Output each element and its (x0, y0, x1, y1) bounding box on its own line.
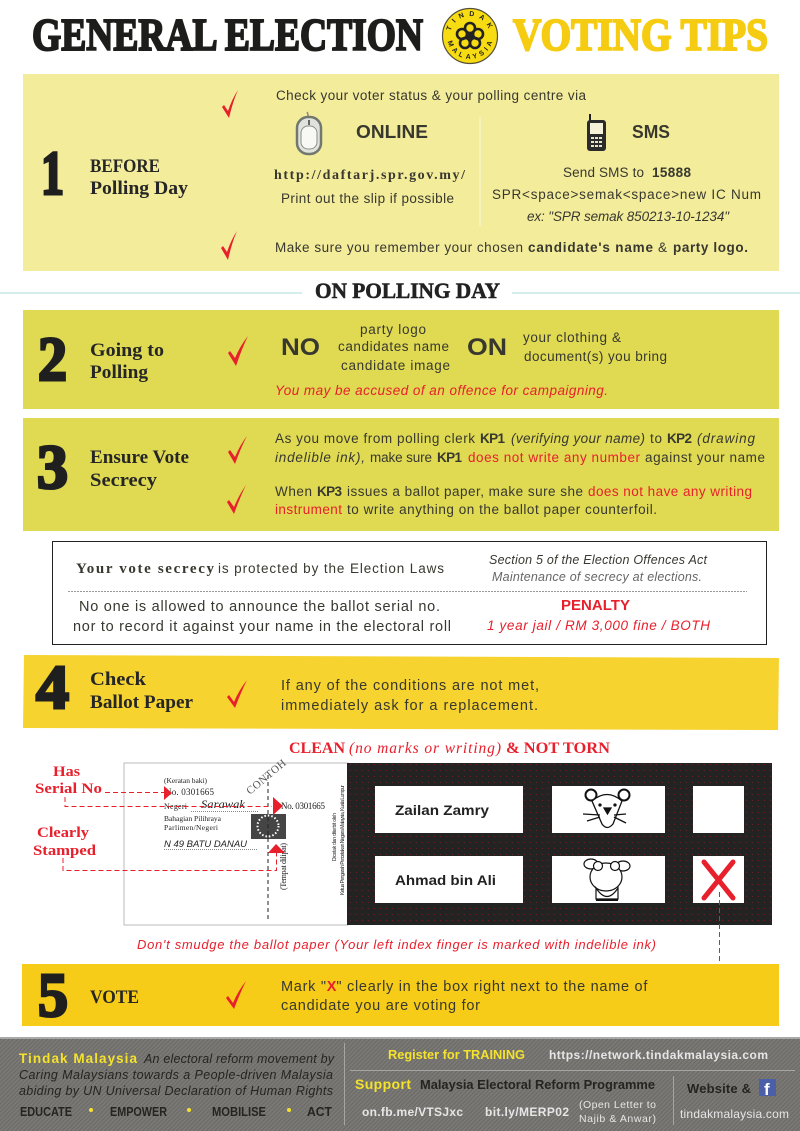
candidate reminder: Make sure you remember your chosen (275, 240, 523, 255)
clerk instructions: (verifying your name) (511, 431, 645, 446)
label: online: ONLINE (356, 122, 428, 142)
vote secrecy statement: is protected by the Election Laws (218, 561, 444, 576)
ballot counterfoil text: Parlimen/Negeri (164, 823, 218, 832)
stamp (251, 814, 286, 839)
clerk instructions: to (650, 431, 662, 446)
divider: on polling day (0, 278, 800, 304)
ballot counterfoil text: N 49 BATU DANAU (164, 839, 247, 850)
clothing and documents: document(s) you bring (524, 349, 667, 364)
ballot paper instructions: does not have any writing (588, 484, 752, 499)
ballot paper sample (124, 757, 772, 925)
about Tindak Malaysia: Caring Malaysians towards a People-driven Malaysia (19, 1068, 333, 1082)
support: Malaysia Electoral Reform Programme (420, 1077, 655, 1092)
printer note (332, 785, 346, 895)
clerk instructions: (drawing (697, 431, 755, 446)
clerk instructions: KP1 (480, 431, 505, 446)
ballot paper instructions: to write anything on the ballot paper counterfoil. (347, 502, 657, 517)
candidate row 1 (375, 786, 744, 833)
icon: mouse (297, 112, 321, 154)
pointer lines and arrows (63, 786, 720, 962)
panel 3: ensure vote secrecy (23, 418, 779, 531)
election offences act reference: Maintenance of secrecy at elections. (492, 570, 702, 584)
icon: check mark (228, 336, 248, 366)
list of prohibited items: party logo (360, 322, 426, 337)
sms instructions: Send SMS to (563, 165, 644, 180)
heading: clean and not torn: (no marks or writing) (349, 740, 501, 757)
sms instructions: SPR<space>semak<space>new IC Num (492, 187, 761, 202)
replacement instruction: If any of the conditions are not met, (281, 678, 539, 694)
clerk instructions: KP2 (667, 431, 692, 446)
motto: MOBILISE (212, 1105, 266, 1119)
support: Najib & Anwar) (579, 1113, 656, 1125)
motto: EMPOWER (110, 1105, 167, 1119)
candidate reminder: & (658, 240, 667, 255)
clothing and documents: your clothing & (523, 330, 621, 345)
step number 2: 2 (38, 326, 67, 394)
ballot paper instructions: When (275, 484, 312, 499)
list of prohibited items: candidates name (338, 339, 449, 354)
ballot paper instructions: KP3 (317, 484, 342, 499)
vote secrecy statement: Your vote secrecy (76, 561, 214, 577)
training registration: https://network.tindakmalaysia.com (549, 1048, 768, 1062)
support: Support (355, 1076, 411, 1092)
heading: going to polling: Going to (90, 341, 164, 361)
sms instructions: 15888 (652, 165, 691, 180)
heading: ensure vote secrecy: Ensure Vote (90, 448, 189, 468)
fold label: (Tempat dilipat) (279, 843, 288, 890)
website address: tindakmalaysia.com (680, 1107, 789, 1121)
voter status intro: Check your voter status & your polling centre via (276, 88, 586, 103)
title: general election: GENERAL ELECTION (32, 10, 423, 60)
step number 3: 3 (37, 434, 68, 502)
icon: mobile phone (587, 114, 606, 151)
penalty details: 1 year jail / RM 3,000 fine / BOTH (487, 618, 710, 633)
list of prohibited items: candidate image (341, 358, 450, 373)
panel: vote secrecy law box (52, 542, 766, 644)
clerk instructions: KP1 (437, 450, 462, 465)
label: has serial no: Has (53, 764, 80, 780)
heading: clean and not torn: & NOT TORN (506, 740, 610, 757)
about Tindak Malaysia: Tindak Malaysia (19, 1051, 137, 1066)
sms instructions (492, 165, 761, 224)
election offences act reference (489, 553, 708, 584)
penalty heading: PENALTY (561, 597, 630, 614)
icon: hamster logo (584, 859, 630, 900)
icon: mouse logo (583, 790, 630, 828)
ballot counterfoil text (164, 776, 326, 850)
icon: facebook: f (764, 1080, 770, 1099)
support: on.fb.me/VTSJxc (362, 1105, 463, 1119)
icon: check mark (222, 90, 238, 118)
icon: check mark (227, 485, 246, 514)
clerk instructions: indelible ink), (275, 450, 365, 465)
replacement instruction: immediately ask for a replacement. (281, 698, 538, 714)
icon: check mark (221, 231, 237, 260)
step number 5: 5 (38, 962, 68, 1030)
panel 1: before polling day (23, 74, 779, 271)
ballot counterfoil text: (Keratan baki) (164, 776, 208, 785)
ballot counterfoil text: Sarawak (201, 797, 246, 811)
sms instructions: ex: "SPR semak 850213-10-1234" (527, 209, 730, 224)
heading: before polling day: Polling Day (90, 179, 189, 199)
candidate row 1: Zailan Zamry (395, 803, 490, 818)
printer note: Dicetak dan diterbit oleh (332, 813, 338, 861)
marked X (704, 862, 733, 898)
ballot paper instructions: issues a ballot paper, make sure she (347, 484, 583, 499)
clerk instructions: against your name (645, 450, 765, 465)
label: sms: SMS (632, 122, 670, 142)
support: bit.ly/MERP02 (485, 1105, 569, 1119)
panel 5: vote (22, 962, 779, 1030)
candidate reminder: candidate's name (528, 240, 653, 255)
heading: clean and not torn: CLEAN (289, 740, 345, 757)
divider: on polling day: ON POLLING DAY (315, 278, 500, 303)
icon: check mark (226, 981, 246, 1009)
heading: check ballot paper: Ballot Paper (90, 693, 193, 713)
candidate row 2: Ahmad bin Ali (395, 873, 496, 888)
label: on: ON (467, 334, 507, 361)
label: no: NO (281, 334, 320, 361)
election offences act reference: Section 5 of the Election Offences Act (489, 553, 708, 567)
ballot counterfoil text: No. 0301665 (281, 801, 326, 811)
vote instruction: Mark " (281, 979, 326, 995)
ballot counterfoil text: No. 0301665 (165, 787, 214, 797)
online address and note (274, 168, 466, 206)
icon: Tindak Malaysia logo: TINDAK (446, 11, 493, 30)
label: clearly stamped: Stamped (33, 843, 97, 859)
clerk instructions: make sure (370, 450, 432, 465)
online address and note: Print out the slip if possible (281, 191, 454, 206)
candidate row 2 (375, 856, 744, 903)
panel 4: check ballot paper (23, 654, 779, 730)
clerk instructions: does not write any number (468, 450, 640, 465)
heading: check ballot paper: Check (90, 670, 147, 690)
candidate reminder: party logo. (673, 240, 748, 255)
motto dots (89, 1108, 291, 1112)
heading: going to polling: Polling (90, 363, 149, 383)
training registration (388, 1047, 768, 1062)
footer (0, 1037, 800, 1131)
support: (Open Letter to (579, 1099, 656, 1111)
motto: ACT (307, 1105, 332, 1119)
website label: Website & (687, 1081, 751, 1096)
heading: before polling day: BEFORE (90, 157, 160, 177)
heading: vote: VOTE (90, 988, 139, 1008)
training registration: Register for TRAINING (388, 1047, 525, 1062)
title: voting tips: VOTING TIPS (513, 10, 768, 60)
ballot paper instructions: instrument (275, 502, 342, 517)
printer note: Ketua Pengarah Percetakan Negara Malaysia, Kuala Lumpur (340, 785, 346, 895)
icon: check mark (227, 680, 247, 708)
motto: EDUCATE (20, 1105, 72, 1119)
icon: check mark (228, 436, 247, 464)
vote instruction: candidate you are voting for (281, 998, 480, 1014)
heading: ensure vote secrecy: Secrecy (90, 471, 158, 491)
label: has serial no: Serial No (35, 781, 102, 797)
arrowheads (164, 786, 285, 853)
label: clearly stamped: Clearly (37, 825, 90, 841)
ballot serial rule: No one is allowed to announce the ballot serial no. (79, 599, 440, 615)
ballot serial rule: nor to record it against your name in the electoral roll (73, 619, 451, 635)
icon: Tindak Malaysia logo: MALAYSIA (448, 40, 492, 60)
contoh watermark: CONTOH (244, 757, 289, 797)
online address and note: http://daftarj.spr.gov.my/ (274, 168, 466, 183)
ballot paper instructions (275, 484, 752, 517)
vote instruction: X" clearly in the box right next to the name of (327, 979, 647, 995)
clerk instructions: As you move from polling clerk (275, 431, 475, 446)
clerk instructions (275, 431, 765, 465)
about Tindak Malaysia: abiding by UN Universal Declaration of Human Rights (19, 1084, 333, 1098)
panel 2: going to polling (23, 310, 779, 409)
ballot counterfoil text: Negeri (164, 802, 188, 811)
smudge warning: Don't smudge the ballot paper (Your left index finger is marked with indelible ink) (137, 937, 656, 952)
about Tindak Malaysia: An electoral reform movement by (143, 1052, 335, 1066)
support (355, 1076, 656, 1125)
icon: Tindak Malaysia logo (442, 8, 498, 64)
candidate section (347, 763, 772, 925)
icon: facebook (759, 1079, 776, 1099)
campaigning warning: You may be accused of an offence for campaigning. (275, 383, 608, 398)
step number 4: 4 (36, 654, 69, 722)
fold line (267, 775, 269, 921)
about Tindak Malaysia (19, 1051, 335, 1098)
step number 1: 1 (41, 140, 64, 208)
ballot counterfoil text: Bahagian Pilihraya (164, 814, 222, 823)
